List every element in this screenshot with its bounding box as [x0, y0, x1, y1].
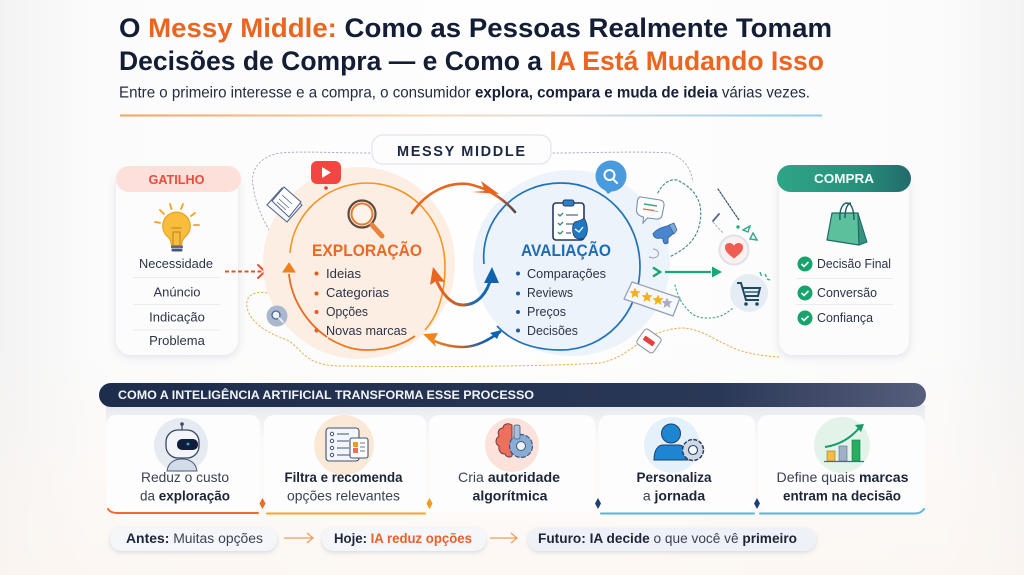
gatilho list: Anúncio [154, 284, 200, 300]
gatilho list: Problema [149, 333, 206, 348]
arrow: middle loop [430, 267, 499, 305]
card connectors [260, 498, 760, 509]
card text: a jornada [643, 488, 705, 504]
icon: thumbs down [653, 223, 677, 244]
avaliação heading: AVALIAÇÃO [521, 240, 611, 260]
subtitle: Entre o primeiro interesse e a compra, o consumidor explora, compara e muda de ideia várias vezes. [119, 84, 810, 102]
card text [636, 469, 712, 504]
exploração list [314, 267, 407, 338]
compra list [796, 256, 893, 326]
timeline: futuro [528, 528, 816, 551]
icon: documents [267, 187, 302, 222]
panel: exploração [263, 167, 455, 359]
timeline: antes [110, 528, 277, 551]
card text: Reduz o custo [141, 469, 229, 485]
arrow: antes to hoje [284, 533, 313, 543]
compra list: Decisão Final [817, 257, 891, 271]
gatilho list: Indicação [149, 310, 205, 324]
icon: small ring [649, 249, 659, 258]
arrow: top loop [412, 181, 515, 213]
section banner [99, 383, 926, 407]
gatilho header: GATILHO [148, 172, 204, 187]
exploração list: Opções [326, 305, 368, 319]
icon: growth chart [814, 417, 870, 473]
icon: shopping bag [827, 203, 867, 245]
icon: search bubble [596, 160, 626, 194]
card: autoridade algorítmica [429, 415, 595, 512]
panel: compra [777, 165, 911, 355]
icon: green chevron [653, 268, 660, 276]
avaliação list: Comparações [527, 267, 606, 281]
compra header [777, 165, 911, 192]
avaliação list: Reviews [527, 286, 573, 300]
exploração list: Novas marcas [326, 324, 407, 338]
icon: robot [154, 418, 208, 472]
card: reduz o custo [106, 415, 260, 512]
icon: chat bubble [636, 197, 664, 223]
exploração list: Ideias [326, 267, 361, 281]
icon: light bulb [155, 204, 199, 252]
arrow: avaliação to compra [665, 266, 722, 278]
card text [458, 469, 560, 504]
arrow: left loop [283, 263, 327, 337]
card text [284, 469, 403, 504]
icon: brain gear [485, 418, 539, 472]
card: personaliza [599, 415, 755, 512]
title: Decisões de Compra — e Como a IA Está Mudando Isso [119, 46, 824, 76]
icon: magnifying glass [348, 200, 382, 236]
icon: green sparks [737, 226, 757, 240]
icon: star rating [624, 282, 680, 316]
icon: video play [311, 161, 341, 190]
icon: cart [730, 272, 770, 312]
icon: clipboard [553, 200, 587, 240]
compra list: Conversão [817, 286, 877, 300]
panel: gatilho [116, 166, 241, 355]
arrow: gatilho to exploração [225, 265, 265, 278]
card text: Define quais marcas [776, 469, 909, 485]
card text [776, 469, 909, 504]
panel: avaliação [473, 170, 670, 356]
label: messy middle: MESSY MIDDLE [397, 144, 525, 160]
card text: entram na decisão [783, 488, 901, 504]
card text: Personaliza [636, 469, 712, 485]
gatilho list: Necessidade [139, 256, 213, 271]
card: filtra e recomenda [264, 415, 426, 512]
compra list: Confiança [817, 311, 873, 325]
avaliação list: Decisões [527, 324, 578, 338]
title: O Messy Middle: Como as Pessoas Realmente Tomam [119, 13, 832, 43]
timeline: hoje [322, 528, 486, 551]
exploração heading: EXPLORAÇÃO [312, 240, 422, 260]
label: messy middle [372, 135, 551, 164]
icon: search badge [266, 306, 288, 326]
card text: opções relevantes [287, 488, 400, 504]
arrow: bottom loop [423, 330, 501, 347]
card text: da exploração [140, 488, 230, 504]
icon: price tag [636, 328, 662, 354]
arrow: hoje to futuro [490, 533, 517, 543]
icon: person gear [644, 417, 704, 473]
avaliação list [516, 267, 606, 338]
compra header: COMPRA [814, 171, 875, 186]
exploração list: Categorias [326, 286, 389, 300]
card text: Cria autoridade [458, 469, 560, 485]
timeline: futuro: Futuro: IA decide o que você vê primeiro [538, 531, 797, 546]
card text: Filtra e recomenda [284, 469, 403, 485]
timeline: hoje: Hoje: IA reduz opções [334, 531, 472, 546]
section banner: COMO A INTELIGÊNCIA ARTIFICIAL TRANSFORMA ESSE PROCESSO [118, 387, 534, 402]
timeline: antes: Antes: Muitas opções [126, 531, 263, 546]
card text [140, 469, 230, 504]
icon: heart [720, 236, 748, 264]
avaliação list: Preços [527, 305, 566, 319]
title [119, 13, 832, 76]
icon: list document [314, 415, 374, 475]
card: define quais marcas [758, 415, 925, 512]
card text: algorítmica [472, 488, 548, 504]
gatilho list [133, 256, 220, 348]
gatilho header [116, 166, 241, 192]
